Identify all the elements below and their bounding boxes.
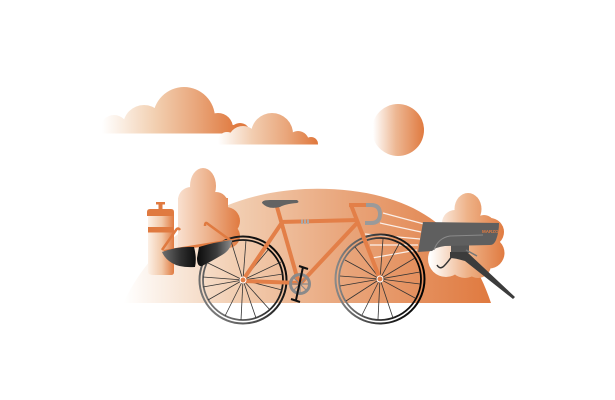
sun (372, 104, 424, 156)
rear wheel (200, 236, 286, 324)
water bottle (147, 202, 174, 275)
brand label: MARZO (482, 229, 499, 234)
bicycle illustration (108, 87, 515, 324)
handlebar (365, 205, 380, 223)
chainring and crank (290, 266, 310, 302)
bicycle frame (243, 205, 380, 284)
saddle (262, 200, 298, 208)
tree: right (428, 193, 504, 278)
hill (123, 189, 491, 303)
front wheel (336, 234, 424, 324)
cloud: small (222, 113, 318, 144)
cloud: large (108, 87, 248, 134)
wheel hubs (240, 276, 383, 283)
gray panel (418, 222, 499, 252)
speed lines (365, 213, 424, 258)
sunglasses (162, 223, 232, 267)
tree: left (178, 168, 240, 248)
kickstand (437, 245, 515, 299)
panel stripe (434, 235, 483, 250)
